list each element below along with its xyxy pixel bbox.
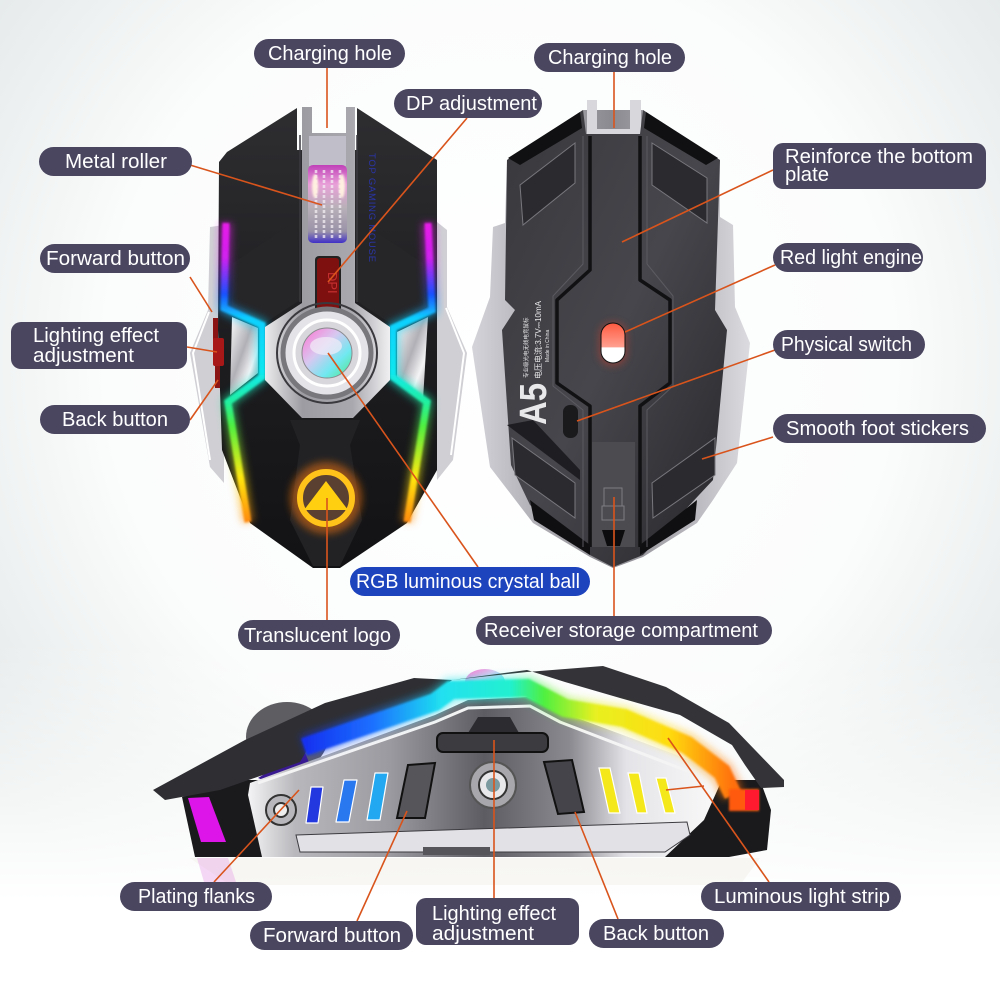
upper shell front (153, 678, 452, 800)
magenta front light (188, 797, 226, 842)
side button: back (544, 760, 584, 814)
model text: 专业级光电无线电竞鼠标 (522, 317, 530, 378)
mouse: top view (190, 107, 467, 568)
black plate (502, 110, 727, 567)
chrome centre channel (265, 107, 390, 418)
label: Lighting effect adjustment (side): adjustment (432, 923, 534, 945)
label: Luminous light strip: Luminous light strip (714, 886, 890, 908)
label: Luminous light strip (701, 882, 901, 911)
reflection (190, 858, 760, 885)
wheel (246, 702, 328, 772)
physical switch (563, 405, 578, 438)
label: Forward button: Forward button (46, 248, 185, 270)
label: RGB luminous crystal ball: RGB luminous crystal ball (356, 571, 580, 593)
label: Physical switch: Physical switch (781, 334, 912, 356)
side buttons (213, 318, 224, 388)
label: Reinforce the bottom plate (773, 143, 986, 189)
label: Plating flanks (120, 882, 272, 911)
leader lines (187, 68, 775, 921)
upper panel facets (232, 220, 300, 323)
label: DP adjustment (394, 89, 542, 118)
label: Metal roller (39, 147, 192, 176)
side button: top lighting (437, 717, 548, 752)
LED strips (224, 223, 432, 522)
label: Lighting effect adjustment (side) (416, 898, 579, 945)
label: Back button: Back button (62, 409, 168, 431)
red rear light (729, 789, 759, 811)
side grips (190, 225, 224, 483)
lower centre panel (290, 420, 362, 566)
label: Plating flanks: Plating flanks (138, 886, 255, 908)
side text: TOP GAMING MOUSE (367, 153, 378, 262)
label: Lighting effect adjustment (11, 322, 187, 369)
chrome body (248, 697, 721, 857)
blue light slots (306, 773, 388, 823)
model text (513, 300, 555, 425)
ring and crystal ball (277, 303, 377, 403)
mouse: side view (153, 666, 784, 885)
silver outer shell (472, 110, 750, 568)
label: Charging hole (bottom view) (534, 43, 685, 72)
label: Reinforce the bottom plate: plate (785, 164, 829, 186)
diagonal band (507, 420, 580, 480)
DPI button: DPI (325, 272, 340, 294)
upper shell rear (452, 666, 784, 788)
label: Receiver storage compartment: Receiver storage compartment (484, 620, 758, 642)
purple glow (258, 750, 310, 782)
label: Smooth foot stickers (773, 414, 986, 443)
label: Smooth foot stickers: Smooth foot stickers (786, 418, 969, 440)
black shell (218, 108, 437, 568)
label: Charging hole (top view) (254, 39, 405, 68)
translucent logo (290, 462, 362, 534)
label: Red light engine: Red light engine (780, 247, 922, 269)
receiver compartment (592, 442, 635, 547)
label: Physical switch (773, 330, 925, 359)
label: Forward button (side): Forward button (263, 925, 401, 947)
light strip (304, 688, 733, 795)
label: Lighting effect adjustment (side): Lighting effect (432, 903, 556, 925)
model text: Made in China (545, 330, 551, 362)
label: Forward button (side) (250, 921, 413, 950)
plate grooves (553, 136, 673, 547)
label: Forward button (40, 244, 190, 273)
label: Lighting effect adjustment: Lighting effect (33, 325, 159, 347)
silver wings (230, 317, 258, 395)
label: Lighting effect adjustment: adjustment (33, 345, 134, 367)
red light engine (599, 322, 627, 366)
rear and lower body (182, 780, 771, 857)
chrome lower rail (296, 822, 690, 852)
side button: forward (397, 763, 435, 818)
charging prongs (587, 100, 641, 134)
label: Back button (side): Back button (603, 923, 709, 945)
label: Translucent logo: Translucent logo (244, 625, 391, 647)
label: Translucent logo (238, 620, 400, 650)
yellow light slots (599, 768, 675, 813)
label: Charging hole (bottom view): Charging hole (548, 47, 672, 69)
chrome screw small (266, 795, 296, 825)
mouse: bottom view (472, 100, 750, 568)
model text: 电压电流:3.7V⎓10mA (533, 300, 543, 379)
label: Back button (40, 405, 190, 434)
metal roller (308, 165, 347, 243)
label: Reinforce the bottom plate: Reinforce the bottom (785, 146, 973, 168)
foot stickers (512, 143, 715, 518)
crystal ball (465, 669, 505, 695)
chrome screw large (470, 762, 516, 808)
bottom corners (530, 500, 590, 555)
DPI button (315, 256, 341, 313)
top corners (508, 112, 582, 165)
label: DP adjustment: DP adjustment (406, 93, 537, 115)
label: Charging hole (top view): Charging hole (268, 43, 392, 65)
label: Metal roller: Metal roller (65, 151, 167, 173)
label: Back button (side) (589, 919, 724, 948)
model text: A5 (513, 383, 555, 425)
